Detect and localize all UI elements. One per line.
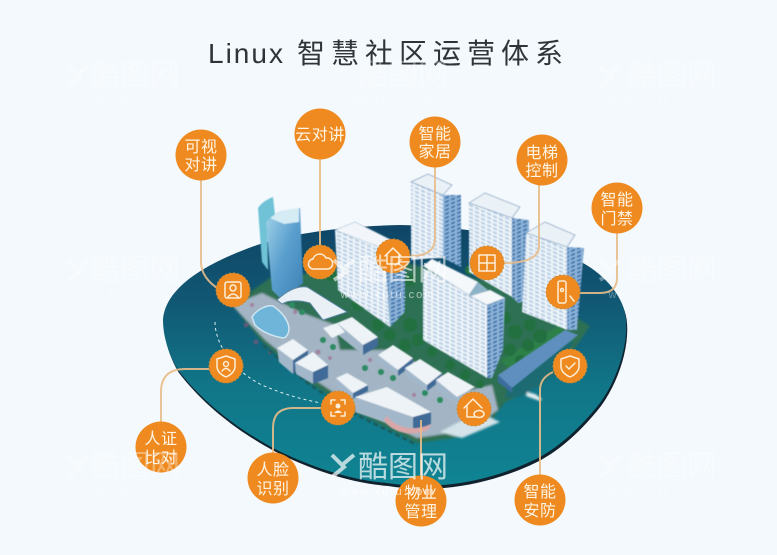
- watermarks: www.kutu.com: [340, 486, 435, 498]
- trees and plaza details: [244, 265, 547, 445]
- label: 人证比对: [136, 422, 186, 472]
- watermarks: www.kutu.com: [608, 94, 703, 106]
- shop 2: [295, 352, 328, 384]
- connector lines: [161, 159, 617, 476]
- shop 8: [355, 387, 431, 433]
- title: Linux: [208, 38, 285, 69]
- watermarks: 酷图网: [358, 254, 448, 287]
- label: 人脸识别: [248, 452, 298, 504]
- community ground: [232, 262, 590, 443]
- tower: rear left: [411, 174, 461, 267]
- label: 智能家居: [410, 116, 460, 168]
- label: 电梯控制: 电梯: [525, 144, 559, 162]
- label: 智能安防: 智能: [523, 483, 557, 501]
- label: 智能安防: 安防: [523, 502, 557, 520]
- label: 可视对讲: 对讲: [184, 156, 218, 174]
- watermarks: [68, 59, 717, 498]
- watermarks: www.kutu.com: [74, 289, 169, 301]
- icon: smart home: [376, 239, 410, 273]
- icon: ID shield: [209, 349, 243, 383]
- label: 物业管理: 物业: [404, 484, 438, 502]
- label: 智能门禁: 门禁: [600, 210, 634, 228]
- label: 人证比对: 比对: [144, 449, 178, 467]
- watermarks: www.kutu.com: [340, 94, 435, 106]
- label: 可视对讲: 可视: [184, 138, 218, 156]
- tower: rear centre: [469, 193, 529, 303]
- watermarks: 酷图网: [627, 450, 717, 483]
- tower: left block: [335, 222, 405, 327]
- watermarks: 酷图网: [358, 59, 448, 92]
- watermarks: 酷图网: [627, 59, 717, 92]
- label: 可视对讲: [176, 130, 226, 180]
- label: 智能家居: 智能: [418, 125, 452, 143]
- icon: cloud: [303, 245, 337, 279]
- label: 云对讲: 云对讲: [295, 126, 345, 144]
- dashed ring: [215, 322, 321, 403]
- watermarks: 酷图网: [90, 450, 180, 483]
- watermarks: www.kutu.com: [340, 289, 435, 301]
- label: 智能家居: 家居: [418, 143, 452, 161]
- shop 1: [277, 339, 308, 374]
- glass tower: [258, 197, 303, 300]
- icon: property house: [457, 392, 491, 426]
- shop 6: [436, 372, 475, 405]
- icon: portrait card: [216, 273, 250, 307]
- tower: front: [423, 259, 505, 378]
- watermarks: www.kutu.com: [74, 485, 169, 497]
- curved mall roof: [277, 287, 347, 320]
- label: 智能安防: [514, 474, 566, 526]
- glass pool: [252, 306, 289, 338]
- watermarks: www.kutu.com: [608, 289, 703, 301]
- shop 4: [378, 345, 413, 376]
- icon: elevator: [470, 246, 504, 280]
- label: 智能门禁: [592, 182, 642, 234]
- icon: face scan: [321, 391, 355, 425]
- low-rise shops: [277, 317, 578, 433]
- icon: door access: [546, 275, 580, 309]
- shop 5: [405, 359, 442, 391]
- label: 人脸识别: 识别: [256, 480, 290, 498]
- title: 智慧社区运营体系: [297, 38, 569, 69]
- watermarks: 酷图网: [90, 59, 180, 92]
- tower: rear right: [522, 222, 584, 330]
- icon: security shield: [553, 349, 587, 383]
- watermarks: www.kutu.com: [608, 485, 703, 497]
- shop 7: [336, 373, 368, 399]
- label: 电梯控制: 控制: [525, 162, 559, 180]
- island base: [163, 225, 627, 489]
- label: 云对讲: [294, 108, 346, 160]
- watermarks: 酷图网: [90, 254, 180, 287]
- label: 物业管理: [396, 476, 446, 526]
- label: 物业管理: 管理: [404, 503, 438, 521]
- label: 人证比对: 人证: [144, 430, 178, 448]
- watermarks: 酷图网: [358, 451, 448, 484]
- watermarks: 酷图网: [627, 254, 717, 287]
- podium: [498, 330, 578, 388]
- shop 3: [323, 317, 378, 355]
- watermarks: www.kutu.com: [74, 94, 169, 106]
- label: 智能门禁: 智能: [600, 191, 634, 209]
- label: 电梯控制: [516, 134, 568, 186]
- label: 人脸识别: 人脸: [256, 461, 290, 479]
